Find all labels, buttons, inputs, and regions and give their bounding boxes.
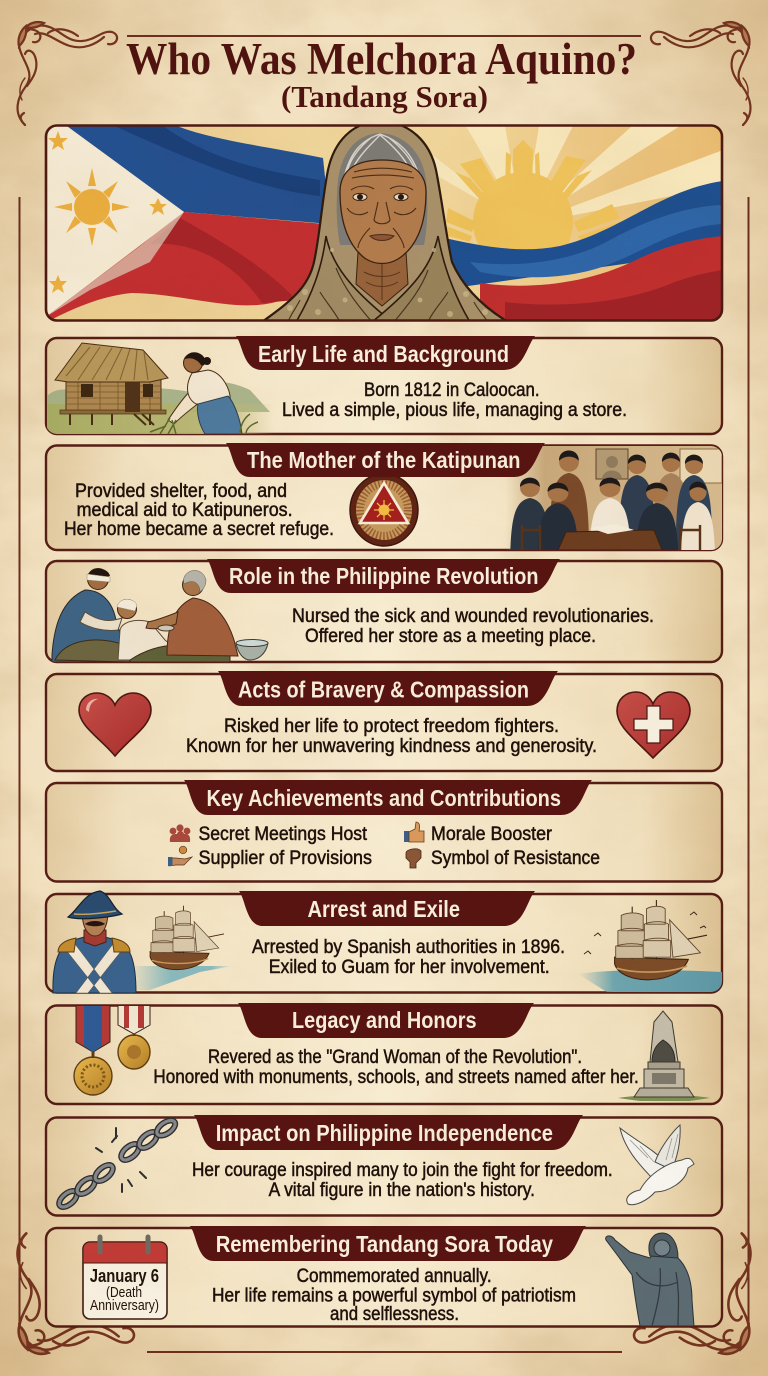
heading ribbon [190, 1226, 586, 1261]
body text: A vital figure in the nation's history. [269, 1179, 535, 1201]
achievement: morale booster: Morale Booster [431, 823, 552, 845]
calendar: (Death [106, 1284, 142, 1301]
body text [153, 1046, 639, 1088]
illustration: spanish soldier [53, 891, 136, 993]
panel: remembering today [46, 1226, 722, 1326]
panel: arrest and exile [46, 891, 722, 994]
right flag waves [440, 181, 723, 290]
illustration: katipunan meeting [508, 446, 722, 550]
body text: Known for her unwavering kindness and generosity. [186, 735, 597, 757]
heading ribbon [207, 559, 560, 593]
woman: gray hair [337, 133, 427, 245]
illustration: medals [74, 1004, 150, 1095]
left flag [64, 124, 330, 224]
calendar: January 6 [90, 1266, 159, 1286]
body text: Nursed the sick and wounded revolutionaries. [292, 605, 654, 627]
body text: Offered her store as a meeting place. [305, 625, 596, 647]
woman: wrapped shawl folds [296, 236, 382, 320]
illustration: bamboo house and woman planting [47, 343, 275, 434]
panel: early life: Early Life and Background [258, 341, 509, 367]
achievement: supplier of provisions: Supplier of Provisions [198, 847, 372, 869]
heading ribbon [184, 780, 592, 815]
calendar [83, 1237, 167, 1319]
body text [64, 480, 334, 540]
panel: role in the revolution: Role in the Philippine Revolution [229, 563, 538, 589]
icon: red heart [79, 693, 151, 756]
body text: Her courage inspired many to join the fight for freedom. [192, 1159, 613, 1181]
illustration: sea and ships [130, 900, 722, 994]
title: (Tandang Sora) [281, 79, 488, 114]
panel: role in the revolution [46, 559, 722, 662]
flag sun and stars [48, 131, 167, 293]
heading ribbon [238, 1003, 534, 1038]
illustration: monument [618, 1011, 710, 1101]
panel: impact on independence: Impact on Philippine Independence [216, 1120, 553, 1146]
panel: key achievements [46, 780, 722, 882]
body text: medical aid to Katipuneros. [77, 499, 293, 521]
body text: Provided shelter, food, and [75, 480, 287, 502]
title: Who Was Melchora Aquino? [126, 34, 637, 84]
panel: key achievements: Key Achievements and Contributions [206, 785, 561, 811]
body text [252, 936, 565, 978]
body text: Exiled to Guam for her involvement. [269, 956, 550, 978]
achievement: symbol of resistance: Symbol of Resistance [431, 847, 600, 869]
illustration: broken chain [56, 1117, 178, 1210]
title [126, 34, 637, 114]
panel: the mother of the katipunan: The Mother of the Katipunan [247, 447, 520, 473]
illustration: statue of Tandang Sora [606, 1233, 694, 1326]
achievement: secret meetings host: Secret Meetings Host [198, 823, 368, 845]
body text [212, 1265, 576, 1325]
panel: legacy and honors [46, 1003, 722, 1104]
panel: early life [46, 336, 722, 434]
body text [186, 715, 597, 757]
sun rays backdrop [352, 126, 721, 216]
emblem: katipunan triangle [350, 474, 418, 546]
hero banner: flag and portrait of Tandang Sora [45, 121, 723, 322]
panel: arrest and exile: Arrest and Exile [308, 896, 460, 922]
panel: remembering today: Remembering Tandang Sora Today [216, 1231, 553, 1257]
body text: Revered as the "Grand Woman of the Revolution". [208, 1046, 582, 1068]
body text: Arrested by Spanish authorities in 1896. [252, 936, 565, 958]
heading ribbon [194, 1115, 583, 1150]
panel: the mother of the katipunan [44, 443, 724, 552]
illustration: nursing the wounded [52, 568, 268, 662]
body text [192, 1159, 613, 1201]
panel: legacy and honors: Legacy and Honors [292, 1007, 476, 1033]
body text: Honored with monuments, schools, and streets named after her. [153, 1066, 639, 1088]
heading ribbon [226, 443, 545, 477]
body text [292, 605, 654, 647]
panel: impact on independence [46, 1115, 722, 1216]
sun emblem [446, 140, 620, 250]
icon: heart with medical cross [617, 692, 690, 758]
woman: face [340, 160, 426, 264]
body text: Her home became a secret refuge. [64, 518, 334, 540]
heading ribbon [218, 671, 558, 706]
body text: and selflessness. [330, 1303, 459, 1325]
body text: Commemorated annually. [297, 1265, 492, 1287]
heading ribbon [239, 891, 535, 926]
woman: neck [356, 252, 408, 306]
body text: Lived a simple, pious life, managing a store. [282, 399, 627, 421]
panel: acts of bravery and compassion: Acts of Bravery & Compassion [238, 676, 529, 702]
heading ribbon [236, 336, 535, 370]
calendar: Anniversary) [90, 1297, 159, 1314]
panel: acts of bravery and compassion [46, 671, 722, 771]
body text: Her life remains a powerful symbol of patriotism [212, 1284, 576, 1306]
body text: Risked her life to protect freedom fighters. [224, 715, 559, 737]
illustration: white dove [620, 1125, 694, 1205]
woman: outer scarf and shawl [262, 121, 508, 322]
body text [282, 379, 627, 421]
body text: Born 1812 in Caloocan. [364, 379, 540, 401]
